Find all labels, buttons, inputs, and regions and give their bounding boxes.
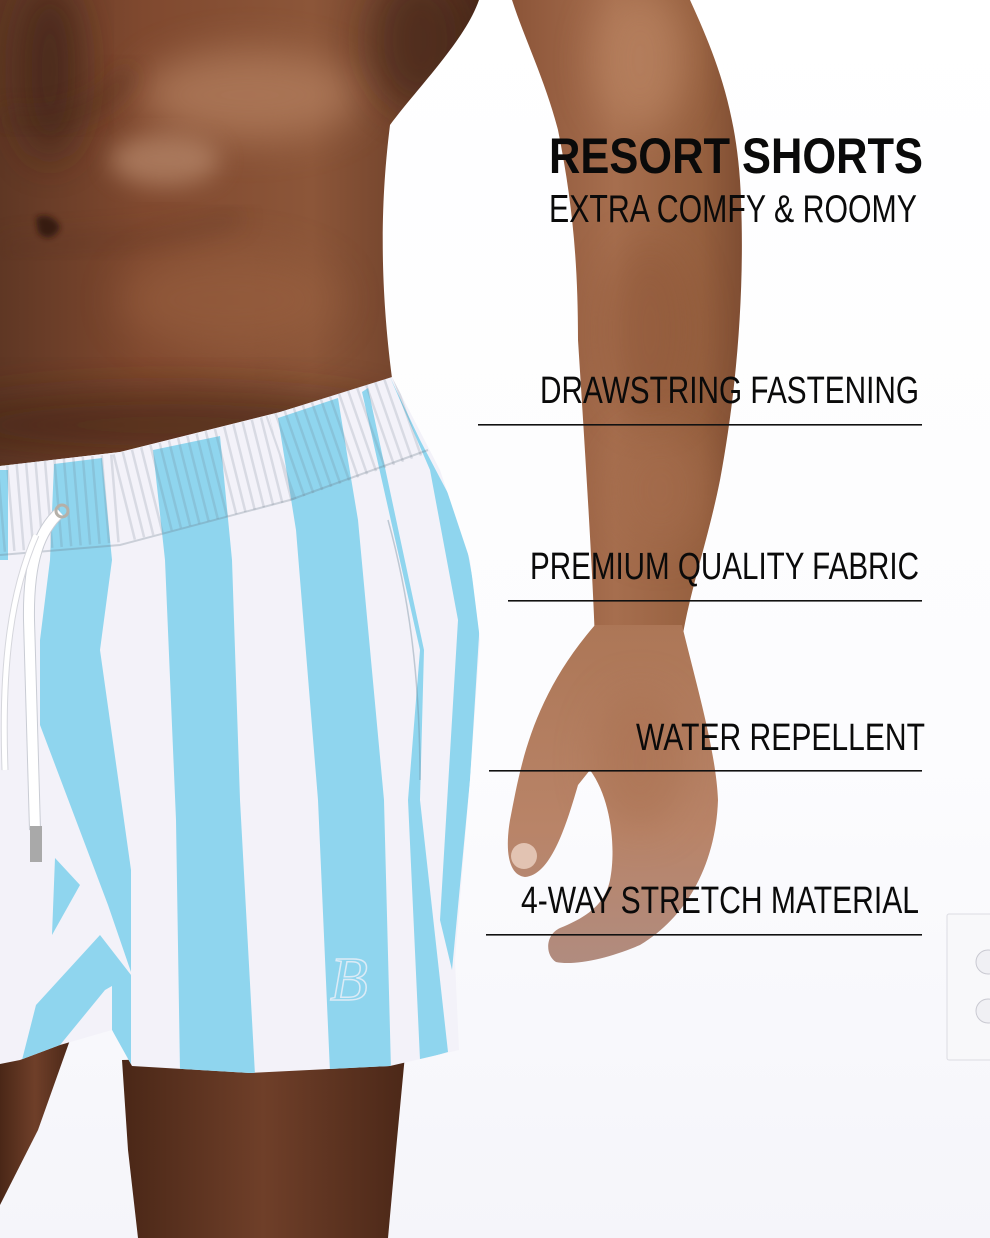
- blue stripes: [0, 377, 480, 1075]
- logo mark on shorts: B: [330, 946, 368, 1014]
- torso: [0, 0, 480, 470]
- legs: [0, 1040, 405, 1238]
- waistband pleats: [0, 412, 412, 508]
- title: RESORT SHORTS: [549, 128, 923, 184]
- waistband seam: [0, 450, 428, 555]
- drawstring: [4, 505, 68, 862]
- arm and hand: [500, 0, 750, 970]
- shorts: [0, 370, 490, 1080]
- pocket seam: [388, 520, 420, 780]
- wall outlet: [947, 914, 990, 1060]
